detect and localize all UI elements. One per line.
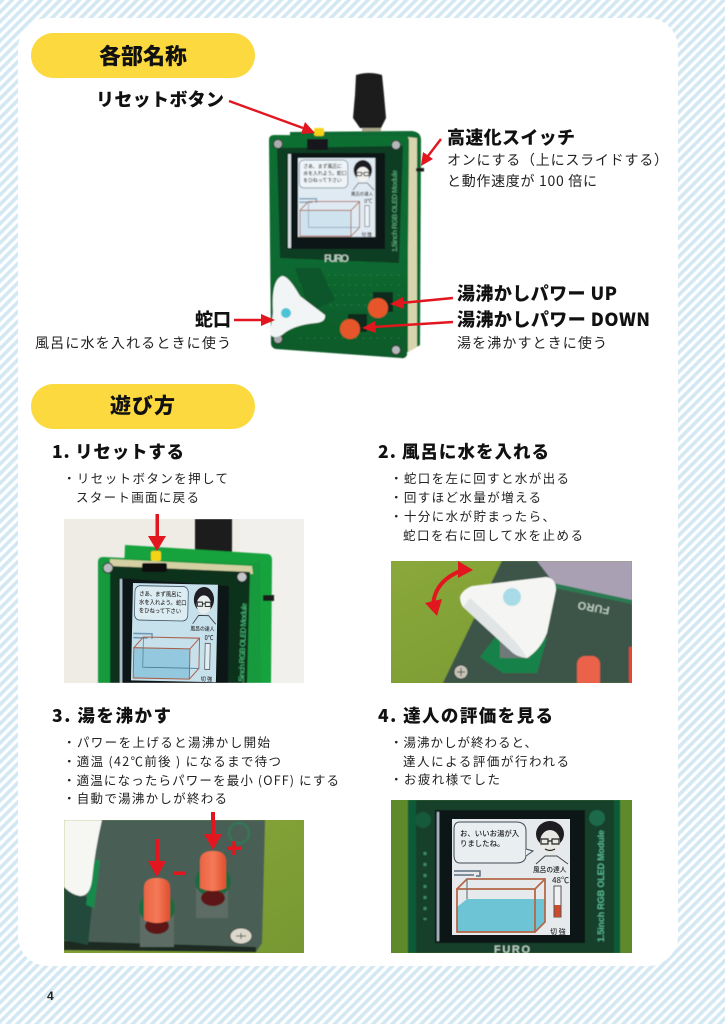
oled module (277, 146, 403, 263)
arrow: power down (362, 321, 453, 333)
screen content: をひねって下さい (303, 177, 342, 184)
screen content: 切 強 (201, 675, 213, 683)
photo: step 2 faucet: FURO (576, 598, 611, 616)
screen content: さあ、まず風呂に (303, 163, 342, 170)
photo: step 3 power buttons (64, 820, 304, 953)
photo: step 2 faucet (391, 561, 635, 689)
text: speed switch description: オンにする（上にスライドする） (447, 150, 668, 170)
photo: step 1 reset: .5inch RGB OLED Module (237, 602, 249, 683)
arrow: button minus (148, 839, 166, 877)
screen content: 0℃ (364, 197, 373, 205)
screen content: 0℃ (204, 632, 214, 642)
front board (269, 135, 409, 358)
slide switch (307, 139, 328, 150)
arrow: button plus (204, 812, 222, 850)
screen content: りましたね。 (460, 838, 504, 849)
screen content (131, 583, 218, 684)
step 1 text: ・リセットボタンを押して (63, 468, 228, 487)
screen content: 水を入れよう。蛇口 (303, 170, 347, 177)
text: faucet description: 風呂に水を入れるときに使う (35, 333, 231, 353)
step 4 text: 達人による評価が行われる (403, 751, 569, 770)
label: 蛇口: 蛇口 (195, 306, 231, 332)
heading pill: 各部名称: 各部名称 (99, 39, 187, 71)
screen content: 風呂の達人 (351, 190, 373, 197)
plus sign (227, 841, 241, 855)
screen content: をひねって下さい (139, 605, 181, 616)
photo: step 4 master evaluation: 1.5inch RGB OLED Module (596, 830, 606, 942)
face lettering: FURO (324, 253, 349, 265)
step 3 text: ・自動で湯沸かしが終わる (63, 788, 227, 807)
step 2 text (390, 468, 583, 544)
screws (274, 140, 282, 148)
board dots (300, 275, 400, 338)
label: 湯沸かしパワー UP: 湯沸かしパワー UP (457, 280, 617, 306)
text: power description: 湯を沸かすときに使う (457, 333, 607, 353)
step 4 text: ・湯沸かしが終わると、 (390, 732, 537, 751)
usb connector (353, 73, 386, 135)
photo: device overview (269, 73, 424, 358)
screen content (298, 158, 375, 238)
heading pill: 遊び方 (31, 384, 255, 429)
label: 湯沸かしパワー DOWN: 湯沸かしパワー DOWN (457, 306, 650, 332)
step 3 text (63, 732, 339, 807)
step 4 heading: 4. 達人の評価を見る (378, 703, 553, 728)
step 2 text: ・蛇口を左に回すと水が出る (390, 468, 569, 487)
step 3 text: ・適温になったらパワーを最小 (OFF) にする (63, 770, 339, 789)
screen content: 風呂の達人 (190, 624, 215, 633)
arrow: reset (229, 101, 315, 134)
screen content: 切 強 (550, 927, 566, 937)
photo: step 4 master evaluation (391, 800, 632, 956)
page number: 4 (47, 989, 54, 1003)
arrow: faucet (234, 314, 275, 326)
step 3 text: ・適温 (42℃前後 ) になるまで待つ (63, 751, 281, 770)
step 2 text: ・回すほど水量が増える (390, 487, 541, 506)
power buttons (373, 292, 393, 312)
label: 高速化スイッチ: 高速化スイッチ (447, 124, 575, 150)
minus sign (173, 872, 186, 875)
step 2 text: ・十分に水が貯まったら、 (390, 506, 555, 525)
arrow: step 1 reset (148, 514, 166, 551)
step 4 text: ・お疲れ様でした (390, 769, 500, 788)
step 4 text (390, 732, 569, 788)
text: speed switch description: と動作速度が 100 倍に (447, 171, 597, 191)
step 3 heading: 3. 湯を沸かす (52, 703, 171, 728)
screen content: 風呂の達人 (533, 864, 567, 874)
arrow: speed switch (421, 139, 441, 166)
arrow: power up (390, 297, 453, 309)
heading pill: 遊び方: 遊び方 (110, 390, 175, 420)
text: speed switch description (447, 150, 668, 191)
photo: step 4 master evaluation: FURO (494, 944, 530, 956)
reset button (314, 128, 324, 136)
screen content: お、いいお湯が入 (460, 828, 520, 839)
arrow: step 2 rotate (425, 561, 473, 616)
screen content: さあ、まず風呂に (139, 588, 182, 599)
screen content (452, 819, 570, 937)
photo: step 1 reset (64, 519, 304, 684)
faucet knob (270, 276, 325, 337)
step 3 text: ・パワーを上げると湯沸かし開始 (63, 732, 270, 751)
screen content: 48℃ (552, 875, 569, 886)
step 1 heading: 1. リセットする (52, 439, 184, 464)
step 1 text: スタート画面に戻る (76, 487, 199, 506)
photo: device overview: 1.5inch RGB OLED Module (390, 170, 399, 252)
screen glass (287, 153, 385, 249)
screen content: 水を入れよう。蛇口 (139, 597, 187, 607)
back board (290, 131, 421, 352)
label: リセットボタン: リセットボタン (96, 86, 224, 112)
heading pill: 各部名称 (31, 33, 255, 78)
faucet shadow (295, 268, 335, 312)
step 1 text (63, 468, 228, 506)
screen content: 切 強 (362, 231, 372, 238)
step 2 heading: 2. 風呂に水を入れる (378, 439, 549, 464)
step 2 text: 蛇口を右に回して水を止める (403, 525, 583, 544)
